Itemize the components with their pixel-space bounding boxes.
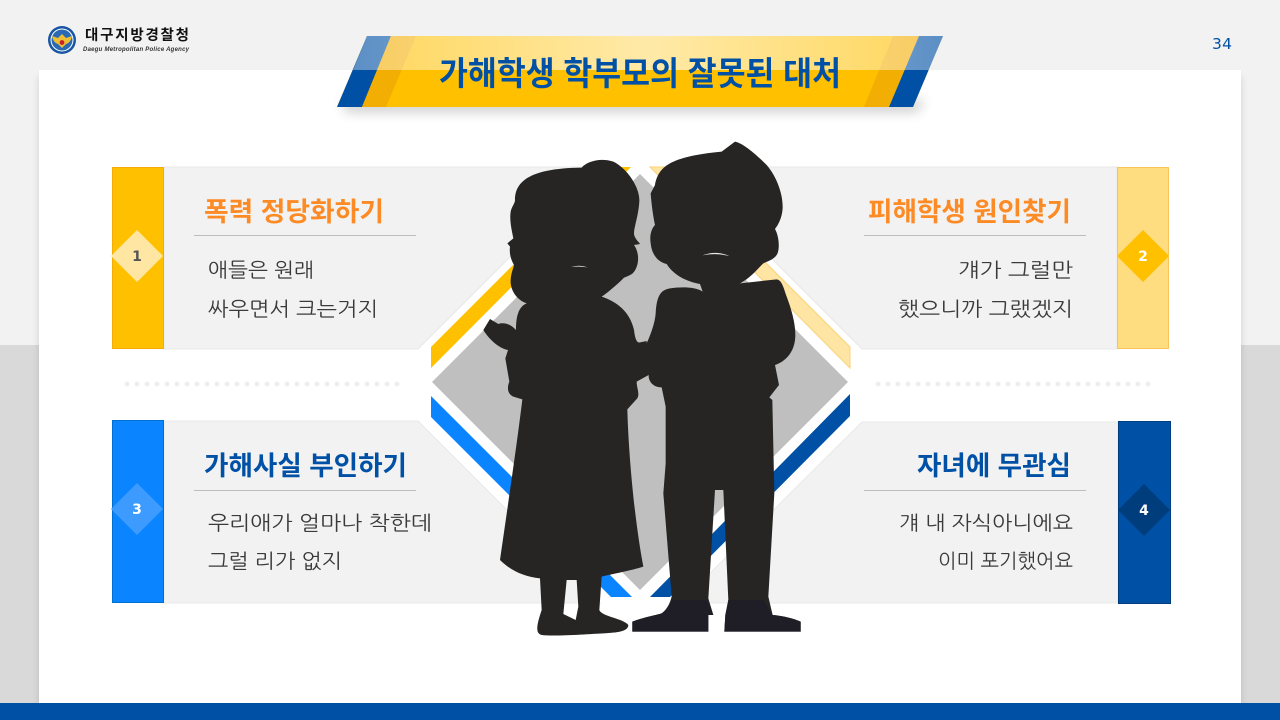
number badge 3: 3 bbox=[132, 502, 142, 518]
quote 1: 애들은 원래 bbox=[208, 260, 314, 280]
heading 1: 폭력 정당화하기 bbox=[204, 197, 384, 227]
title: 가해학생 학부모의 잘못된 대처 bbox=[439, 55, 841, 92]
number badge 4: 4 bbox=[1139, 503, 1149, 519]
icon: police emblem bbox=[48, 26, 76, 54]
quote 3: 그럴 리가 없지 bbox=[208, 551, 342, 571]
panel 3: denying the facts bbox=[111, 420, 600, 603]
logo: Daegu Metropolitan Police Agency bbox=[48, 26, 190, 54]
number badge 3 bbox=[111, 483, 163, 535]
dotted divider left bbox=[127, 382, 400, 386]
quote 2: 했으니까 그랬겠지 bbox=[898, 299, 1073, 319]
agency name: 대구지방경찰청 bbox=[85, 27, 189, 44]
number badge 2: 2 bbox=[1138, 249, 1148, 265]
heading 4: 자녀에 무관심 bbox=[917, 451, 1071, 481]
title banner bbox=[337, 36, 943, 112]
agency english name: Daegu Metropolitan Police Agency bbox=[83, 47, 190, 53]
number badge 2 bbox=[1117, 230, 1169, 282]
panel 1: justifying violence bbox=[111, 167, 600, 349]
silhouette: mother bbox=[483, 160, 649, 636]
panel 2: blaming the victim bbox=[680, 167, 1169, 349]
heading 2: 피해학생 원인찾기 bbox=[868, 197, 1071, 227]
number badge 4 bbox=[1118, 484, 1170, 536]
band: top-left bbox=[431, 167, 631, 368]
quote 1: 싸우면서 크는거지 bbox=[208, 299, 378, 319]
band: top-right bbox=[650, 167, 850, 368]
quote 4 bbox=[899, 513, 1073, 571]
quote 3: 우리애가 얼마나 착한데 bbox=[208, 513, 432, 533]
panel 4: indifference to the child bbox=[680, 422, 1170, 604]
footer bar bbox=[0, 703, 1280, 720]
quote 4: 걔 내 자식아니에요 bbox=[899, 513, 1073, 533]
quote 2 bbox=[898, 260, 1073, 319]
silhouette: father bbox=[632, 142, 801, 632]
number badge 1: 1 bbox=[132, 249, 142, 265]
band: bottom-right bbox=[650, 394, 850, 597]
page number: 34 bbox=[1212, 35, 1232, 53]
band: bottom-left bbox=[431, 396, 632, 597]
quote 3 bbox=[208, 513, 432, 571]
dotted divider right bbox=[878, 382, 1151, 386]
quote 4: 이미 포기했어요 bbox=[938, 551, 1073, 571]
quote 1 bbox=[208, 260, 378, 319]
number badge 1 bbox=[111, 230, 163, 282]
silhouettes of parents bbox=[483, 142, 801, 636]
heading 3: 가해사실 부인하기 bbox=[204, 451, 407, 481]
central diamond bbox=[431, 167, 850, 597]
quote 2: 걔가 그럴만 bbox=[958, 260, 1073, 280]
